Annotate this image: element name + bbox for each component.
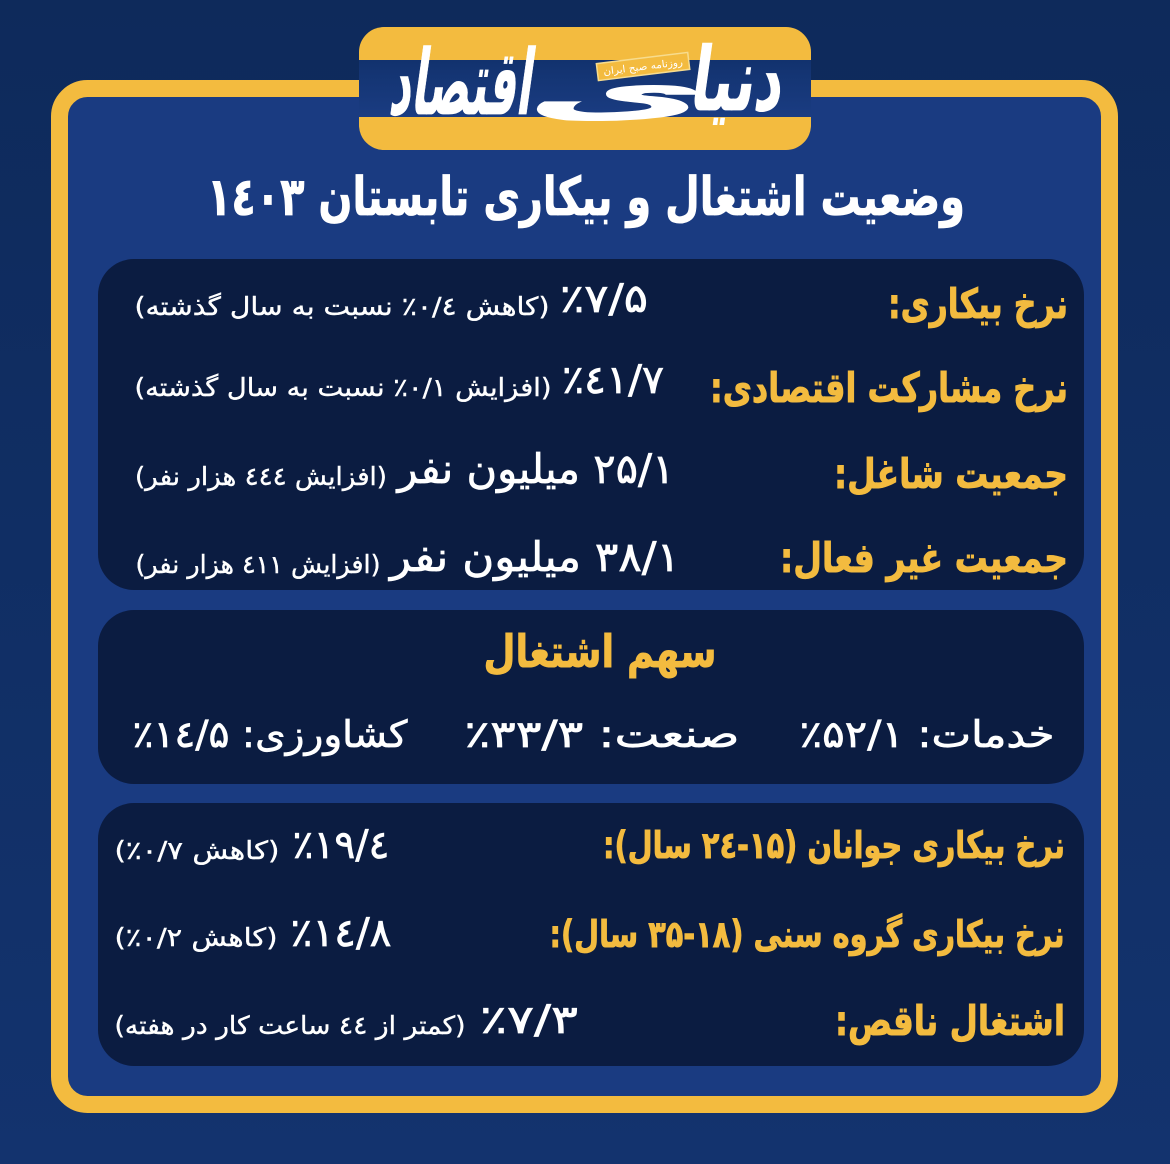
row: economic participation rate bbox=[134, 358, 1068, 412]
panel: labour indicators bbox=[98, 259, 1084, 590]
panel: employment share bbox=[98, 610, 1084, 784]
row: employed population: جمعیت شاغل: bbox=[834, 450, 1068, 498]
title: وضعیت اشتغال و بیکاری تابستان ۱٤۰۳ bbox=[207, 167, 965, 228]
heading: employment share: سهم اشتغال bbox=[484, 625, 716, 678]
row: employed population: ؜۲۵/۱ میلیون نفر bbox=[395, 445, 674, 493]
row: inactive population: ؜۳۸/۱ میلیون نفر bbox=[388, 533, 680, 581]
logo: Donya-e Eqtesad: روزنامه صبح ایران bbox=[603, 57, 684, 78]
row: youth unemployment: ؜۱۹/٤٪ bbox=[292, 823, 390, 868]
row: youth unemployment: (کاهش ۰/۷٪) bbox=[115, 836, 280, 865]
row: underemployment: ؜۷/۳٪ bbox=[480, 998, 578, 1043]
share: services: خدمات: ۵۲/۱٪ bbox=[800, 713, 1054, 756]
row: youth unemployment bbox=[115, 823, 1065, 868]
row: age 18-35 unemployment: نرخ بیکاری گروه سنی (۱۸-۳۵ سال): bbox=[549, 913, 1064, 956]
row: inactive population: جمعیت غیر فعال: bbox=[780, 534, 1068, 582]
row: unemployment rate: ؜۷/۵٪ bbox=[560, 277, 648, 322]
row: underemployment bbox=[114, 997, 1065, 1045]
outer yellow frame bbox=[60, 88, 1110, 1104]
row: economic participation rate: (افزایش ۰/۱٪ نسبت به سال گذشته) bbox=[134, 373, 551, 402]
row: underemployment: اشتغال ناقص: bbox=[835, 997, 1065, 1045]
row: unemployment rate bbox=[134, 277, 1068, 328]
logo: Donya-e Eqtesad: دنیا bbox=[686, 28, 792, 131]
row: economic participation rate: ؜٤۱/۷٪ bbox=[562, 358, 664, 403]
logo: Donya-e Eqtesad bbox=[359, 27, 811, 150]
row: unemployment rate: (کاهش ۰/٤٪ نسبت به سال گذشته) bbox=[134, 292, 549, 321]
row: age 18-35 unemployment: (کاهش ۰/۲٪) bbox=[115, 923, 278, 952]
row: age 18-35 unemployment: ؜۱٤/۸٪ bbox=[290, 911, 392, 956]
row: employed population: (افزایش ٤٤٤ هزار نفر) bbox=[135, 462, 387, 491]
row: inactive population: (افزایش ٤۱۱ هزار نفر) bbox=[136, 550, 380, 579]
row: underemployment: (کمتر از ٤٤ ساعت کار در هفته) bbox=[114, 1011, 466, 1040]
share: industry: صنعت: ۳۳/۳٪ bbox=[464, 713, 740, 756]
share: agriculture: کشاورزی: ۱٤/۵٪ bbox=[132, 713, 408, 756]
row: age 18-35 unemployment bbox=[115, 911, 1065, 956]
row: inactive population bbox=[136, 533, 1068, 582]
row: unemployment rate: نرخ بیکاری: bbox=[888, 280, 1068, 328]
panel: youth and underemployment bbox=[98, 803, 1084, 1066]
row: youth unemployment: نرخ بیکاری جوانان (۱۵-۲٤ سال): bbox=[603, 824, 1065, 867]
row: economic participation rate: نرخ مشارکت اقتصادی: bbox=[710, 364, 1068, 412]
logo: Donya-e Eqtesad: اقتصاد bbox=[385, 31, 542, 136]
logo: Donya-e Eqtesad: ی bbox=[523, 56, 713, 129]
row: employed population bbox=[135, 445, 1068, 498]
